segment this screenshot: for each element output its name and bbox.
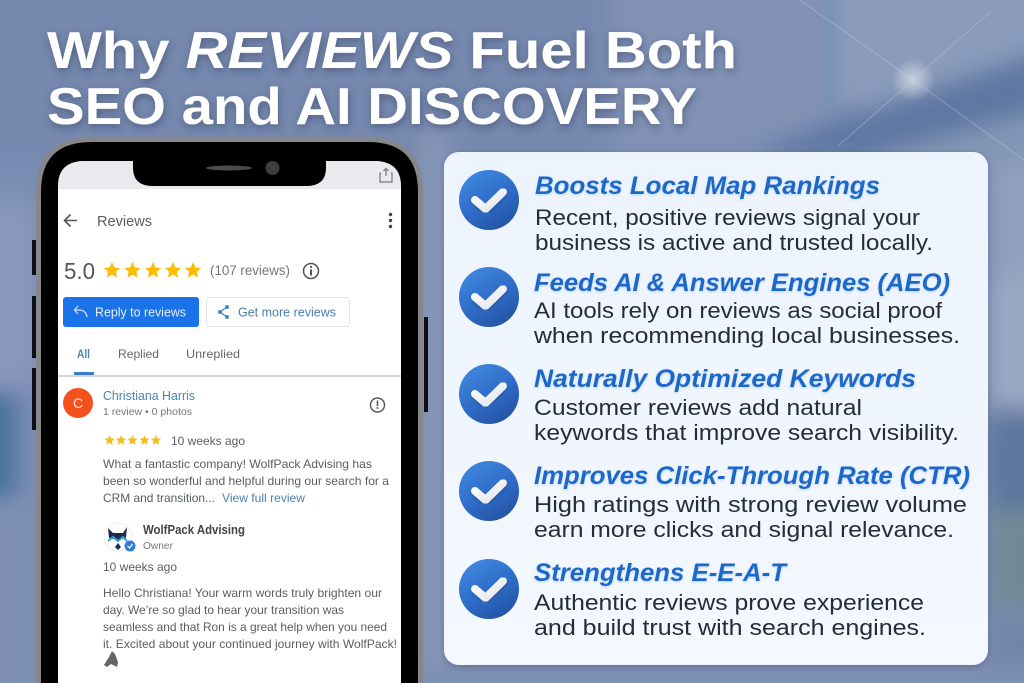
browser bar xyxy=(58,161,401,189)
tabs xyxy=(58,347,401,377)
customer review: CRM and transition... xyxy=(103,491,215,505)
rating summary: (107 reviews) xyxy=(210,262,290,278)
button: reply to reviews xyxy=(63,297,199,327)
customer review xyxy=(63,388,389,505)
customer review: C xyxy=(73,395,83,411)
benefit: AI and answer engines: when recommending local businesses. xyxy=(533,323,960,348)
tabs: Replied xyxy=(118,347,159,361)
rating summary: 5.0 xyxy=(64,258,95,284)
benefit: local map rankings: business is active and trusted locally. xyxy=(535,230,933,255)
notch xyxy=(133,161,326,186)
phone body xyxy=(38,140,420,683)
app bar xyxy=(64,213,392,230)
customer review: 1 review • 0 photos xyxy=(103,406,192,418)
benefit: click-through rate: Improves Click-Through Rate (CTR) xyxy=(534,462,970,490)
title: SEO and AI DISCOVERY xyxy=(47,78,697,136)
benefit: E-E-A-T: Strengthens E-E-A-T xyxy=(534,559,789,587)
tabs: All xyxy=(77,347,90,361)
panel: benefits xyxy=(444,152,988,665)
benefit: AI and answer engines: Feeds AI & Answer Engines (AEO) xyxy=(534,269,950,297)
icon: wolfpack logo xyxy=(104,523,136,552)
benefit: local map rankings: Boosts Local Map Rankings xyxy=(535,172,880,200)
phone screen xyxy=(58,161,401,683)
owner reply: day. We’re so glad to hear your transition was xyxy=(103,603,344,617)
benefit: E-E-A-T: and build trust with search engines. xyxy=(534,615,926,640)
benefit: optimized keywords: Customer reviews add natural xyxy=(534,395,862,420)
benefit: click-through rate: earn more clicks and signal relevance. xyxy=(534,517,954,542)
title: Why REVIEWS Fuel Both xyxy=(47,22,737,80)
benefit: optimized keywords: keywords that improve search visibility. xyxy=(534,420,959,445)
benefit: click-through rate: High ratings with strong review volume xyxy=(534,492,967,517)
tabs: Unreplied xyxy=(186,347,240,361)
owner reply: 10 weeks ago xyxy=(103,560,177,574)
owner reply: seamless and that Ron is a great help when you need xyxy=(103,620,387,634)
owner reply xyxy=(103,523,397,667)
owner reply: WolfPack Advising xyxy=(143,523,245,537)
button: get more reviews: Get more reviews xyxy=(238,306,336,320)
owner reply: Hello Christiana! Your warm words truly brighten our xyxy=(103,586,382,600)
icon: share xyxy=(380,168,392,182)
owner reply: Owner xyxy=(143,540,173,552)
icon: wolf emoji xyxy=(104,651,118,667)
customer review: What a fantastic company! WolfPack Advising has xyxy=(103,457,372,471)
benefit: E-E-A-T xyxy=(459,559,926,640)
button: get more reviews xyxy=(206,298,350,326)
benefit: local map rankings: Recent, positive reviews signal your xyxy=(535,205,921,230)
owner reply: it. Excited about your continued journey with WolfPack! xyxy=(103,637,397,651)
phone side buttons xyxy=(32,240,428,430)
button: reply to reviews: Reply to reviews xyxy=(95,306,186,320)
lens flare xyxy=(800,0,1024,160)
benefit: E-E-A-T: Authentic reviews prove experience xyxy=(534,590,924,615)
rating summary xyxy=(64,258,318,284)
customer review: been so wonderful and helpful during our search for a xyxy=(103,474,389,488)
benefit: AI and answer engines: AI tools rely on reviews as social proof xyxy=(534,298,943,323)
benefit: optimized keywords: Naturally Optimized Keywords xyxy=(534,365,916,393)
customer review: 10 weeks ago xyxy=(171,434,245,448)
app bar: Reviews xyxy=(97,213,152,230)
benefit: click-through rate xyxy=(459,461,970,542)
customer review: Christiana Harris xyxy=(103,389,195,403)
title xyxy=(47,22,737,136)
benefit: optimized keywords xyxy=(459,364,959,445)
customer review: View full review xyxy=(222,491,305,505)
phone mockup xyxy=(32,140,428,683)
benefit: AI and answer engines xyxy=(459,267,960,348)
benefit: local map rankings xyxy=(459,170,933,255)
